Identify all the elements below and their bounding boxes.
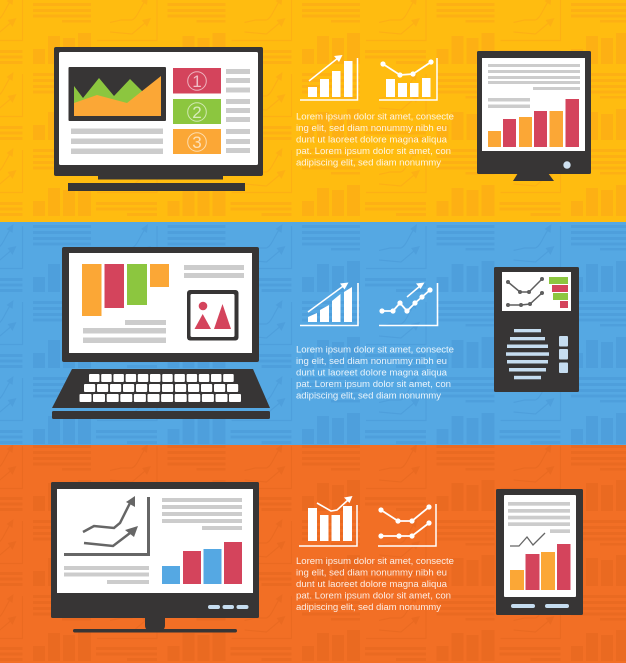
orange: tablet — [496, 489, 583, 615]
text block: yellow: ing elit, sed diam nonummy nibh eu — [296, 123, 447, 134]
panel: blue band — [0, 222, 626, 445]
text block: blue: ing elit, sed diam nonummy nibh eu — [296, 356, 447, 367]
text block: blue: adipiscing elit, sed diam nonummy — [296, 390, 441, 402]
text block: orange: pat. Lorem ipsum dolor sit amet, con — [296, 590, 451, 602]
hanging bars — [82, 264, 169, 316]
icon: double line chart (orange) — [378, 504, 436, 546]
numbered box 1 — [173, 68, 221, 94]
text block: yellow — [296, 112, 454, 168]
area chart — [68, 67, 166, 121]
text block: yellow: adipiscing elit, sed diam nonummy — [296, 158, 441, 168]
bar chart — [488, 99, 579, 147]
text block: yellow: Lorem ipsum dolor sit amet, consecte — [296, 112, 454, 122]
icon: rising bars with arrow (yellow) — [300, 55, 358, 100]
small line chart — [510, 533, 545, 546]
buttons — [559, 336, 568, 373]
speaker grille — [506, 329, 549, 379]
numbered box 3: 3 — [192, 133, 202, 152]
text block: orange: dunt ut laoreet dolore magna aliqua — [296, 579, 448, 590]
panel: yellow band — [0, 0, 626, 222]
numbered box 3 — [173, 129, 221, 154]
image placeholder — [187, 290, 238, 340]
arrow line chart — [64, 496, 148, 554]
orange: widescreen monitor — [51, 482, 259, 632]
keyboard — [52, 369, 270, 419]
icon: bars with line chart (yellow) — [379, 58, 437, 100]
bar chart — [510, 544, 570, 590]
text block: blue: Lorem ipsum dolor sit amet, consecte — [296, 344, 454, 356]
blue: tower with speaker — [494, 267, 579, 392]
text block: orange: ing elit, sed diam nonummy nibh eu — [296, 568, 447, 578]
panel: orange band — [0, 445, 626, 663]
text block: yellow: dunt ut laoreet dolore magna aliqua — [296, 134, 448, 146]
icon: bars with arrow line (orange) — [299, 496, 357, 546]
text block: blue: dunt ut laoreet dolore magna aliqua — [296, 368, 448, 378]
text block: orange: Lorem ipsum dolor sit amet, consecte — [296, 556, 454, 567]
yellow: small monitor with bar chart — [477, 51, 591, 181]
text block: orange — [296, 556, 454, 613]
bar chart — [162, 542, 242, 584]
buttons — [208, 605, 248, 609]
numbered box 2 — [173, 99, 221, 124]
line charts — [506, 277, 544, 307]
blue: laptop — [52, 247, 270, 419]
text block: yellow: pat. Lorem ipsum dolor sit amet, con — [296, 146, 451, 157]
numbered box 2: 2 — [192, 103, 202, 122]
icon: stepped rising bars with arrow (blue) — [300, 282, 358, 326]
numbered box 1: 1 — [192, 72, 202, 91]
text block: blue: pat. Lorem ipsum dolor sit amet, con — [296, 379, 451, 390]
text block: blue — [296, 344, 454, 402]
text block: orange: adipiscing elit, sed diam nonummy — [296, 602, 441, 613]
yellow: desktop monitor dashboard — [54, 47, 263, 191]
icon: dotted line chart with arrow (blue) — [379, 282, 438, 326]
buttons — [511, 604, 569, 608]
